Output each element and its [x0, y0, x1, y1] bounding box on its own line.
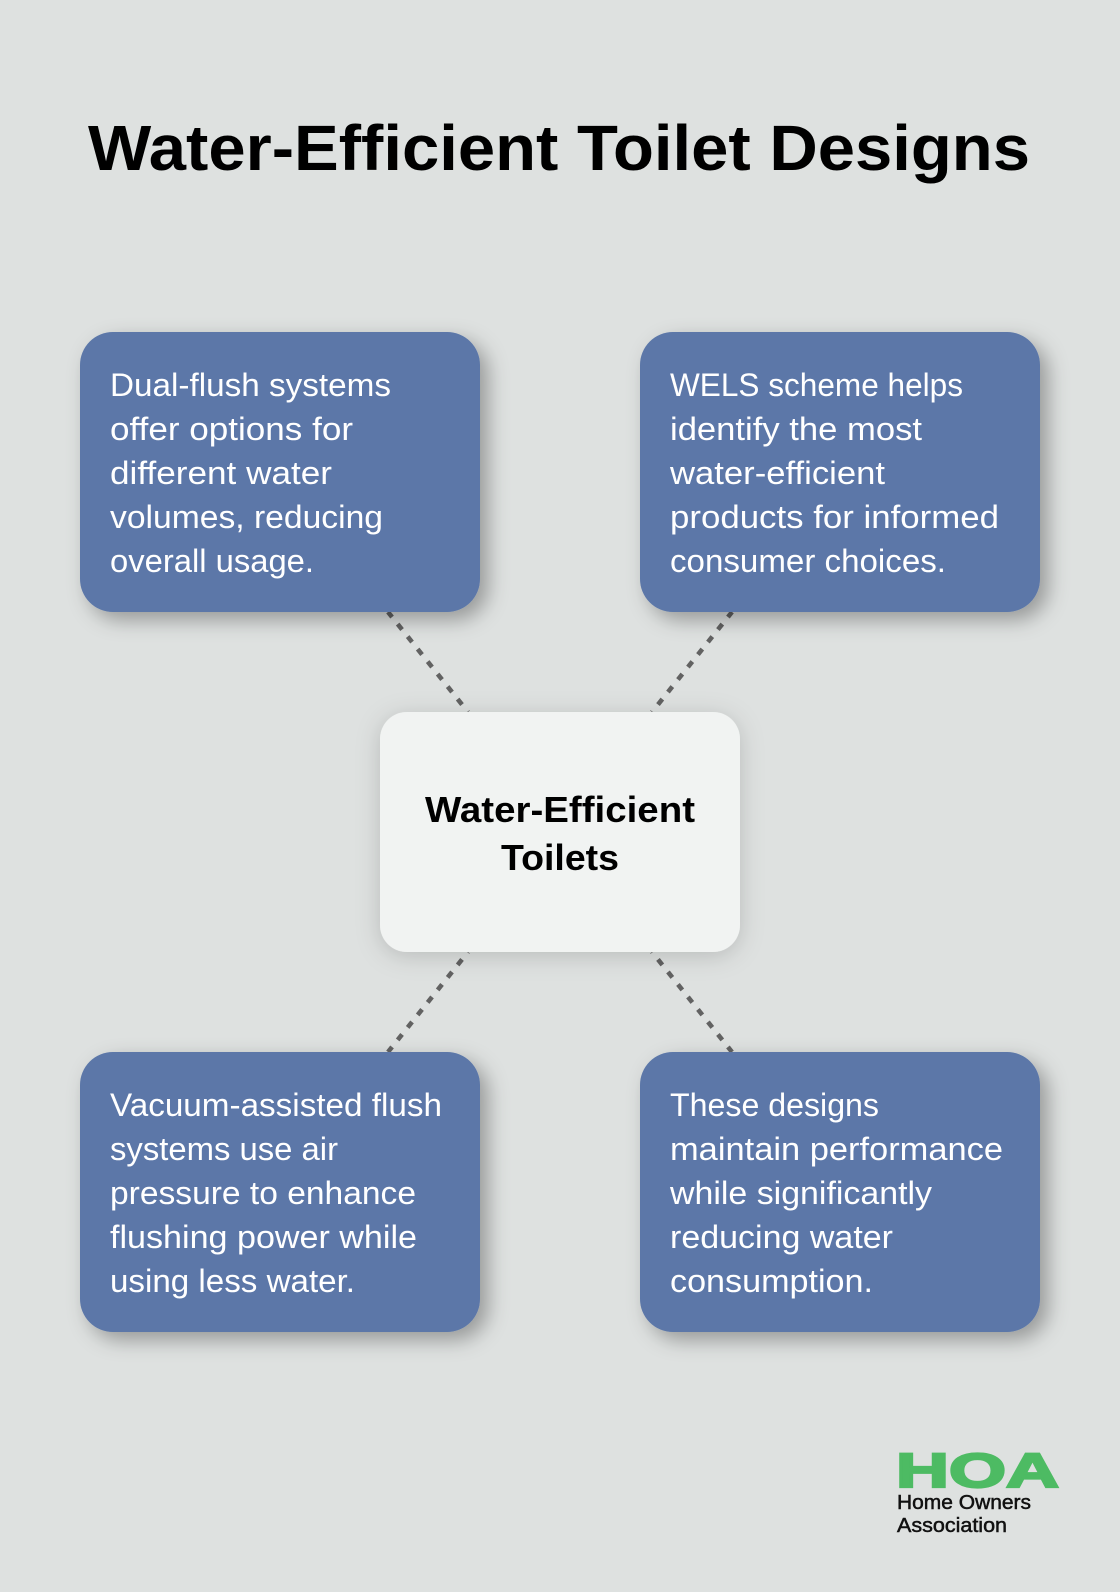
title: Water-Efficient Toilet Designs	[88, 112, 1030, 184]
panel: vacuum-assisted flush: Vacuum-assisted flush	[110, 1087, 442, 1123]
panel: dual-flush systems: offer options for	[110, 411, 353, 447]
panel: dual-flush systems: overall usage.	[110, 543, 314, 579]
panel: performance and consumption: while significantly	[669, 1175, 932, 1211]
connector: bottom-left card to center	[388, 952, 468, 1052]
panel: vacuum-assisted flush: using less water.	[110, 1263, 355, 1299]
panel: dual-flush systems	[80, 332, 480, 612]
connector: top-right card to center	[652, 612, 732, 712]
panel: center topic	[380, 712, 740, 952]
panel: vacuum-assisted flush	[80, 1052, 480, 1332]
connector: top-left card to center	[388, 612, 468, 712]
panel: WELS scheme: water-efficient	[669, 455, 885, 491]
panel: performance and consumption: consumption.	[670, 1263, 873, 1299]
panel: vacuum-assisted flush: pressure to enhance	[110, 1175, 416, 1211]
panel: WELS scheme: WELS scheme helps	[670, 367, 963, 403]
logo: HOA Home Owners Association	[896, 1445, 1059, 1537]
panel: vacuum-assisted flush: flushing power while	[110, 1219, 417, 1255]
panel: performance and consumption	[640, 1052, 1040, 1332]
panel: dual-flush systems: different water	[110, 455, 332, 491]
panel: center topic: Water-Efficient	[425, 789, 695, 830]
panel: dual-flush systems: volumes, reducing	[110, 499, 383, 535]
panel: WELS scheme	[640, 332, 1040, 612]
panel: performance and consumption: maintain performance	[670, 1131, 1003, 1167]
panel: WELS scheme: products for informed	[670, 499, 999, 535]
panel: vacuum-assisted flush: systems use air	[110, 1131, 338, 1167]
connector: bottom-right card to center	[652, 952, 732, 1052]
panel: WELS scheme: identify the most	[670, 411, 922, 447]
logo: HOA Home Owners Association: Home Owners	[897, 1492, 1031, 1514]
panel: performance and consumption: These designs	[670, 1087, 879, 1123]
logo: HOA Home Owners Association: Association	[897, 1515, 1007, 1537]
panel: dual-flush systems: Dual-flush systems	[110, 367, 391, 403]
panel: performance and consumption: reducing water	[670, 1219, 893, 1255]
logo: HOA Home Owners Association: HOA	[896, 1445, 1059, 1498]
panel: WELS scheme: consumer choices.	[670, 543, 946, 579]
panel: center topic: Toilets	[501, 837, 619, 878]
